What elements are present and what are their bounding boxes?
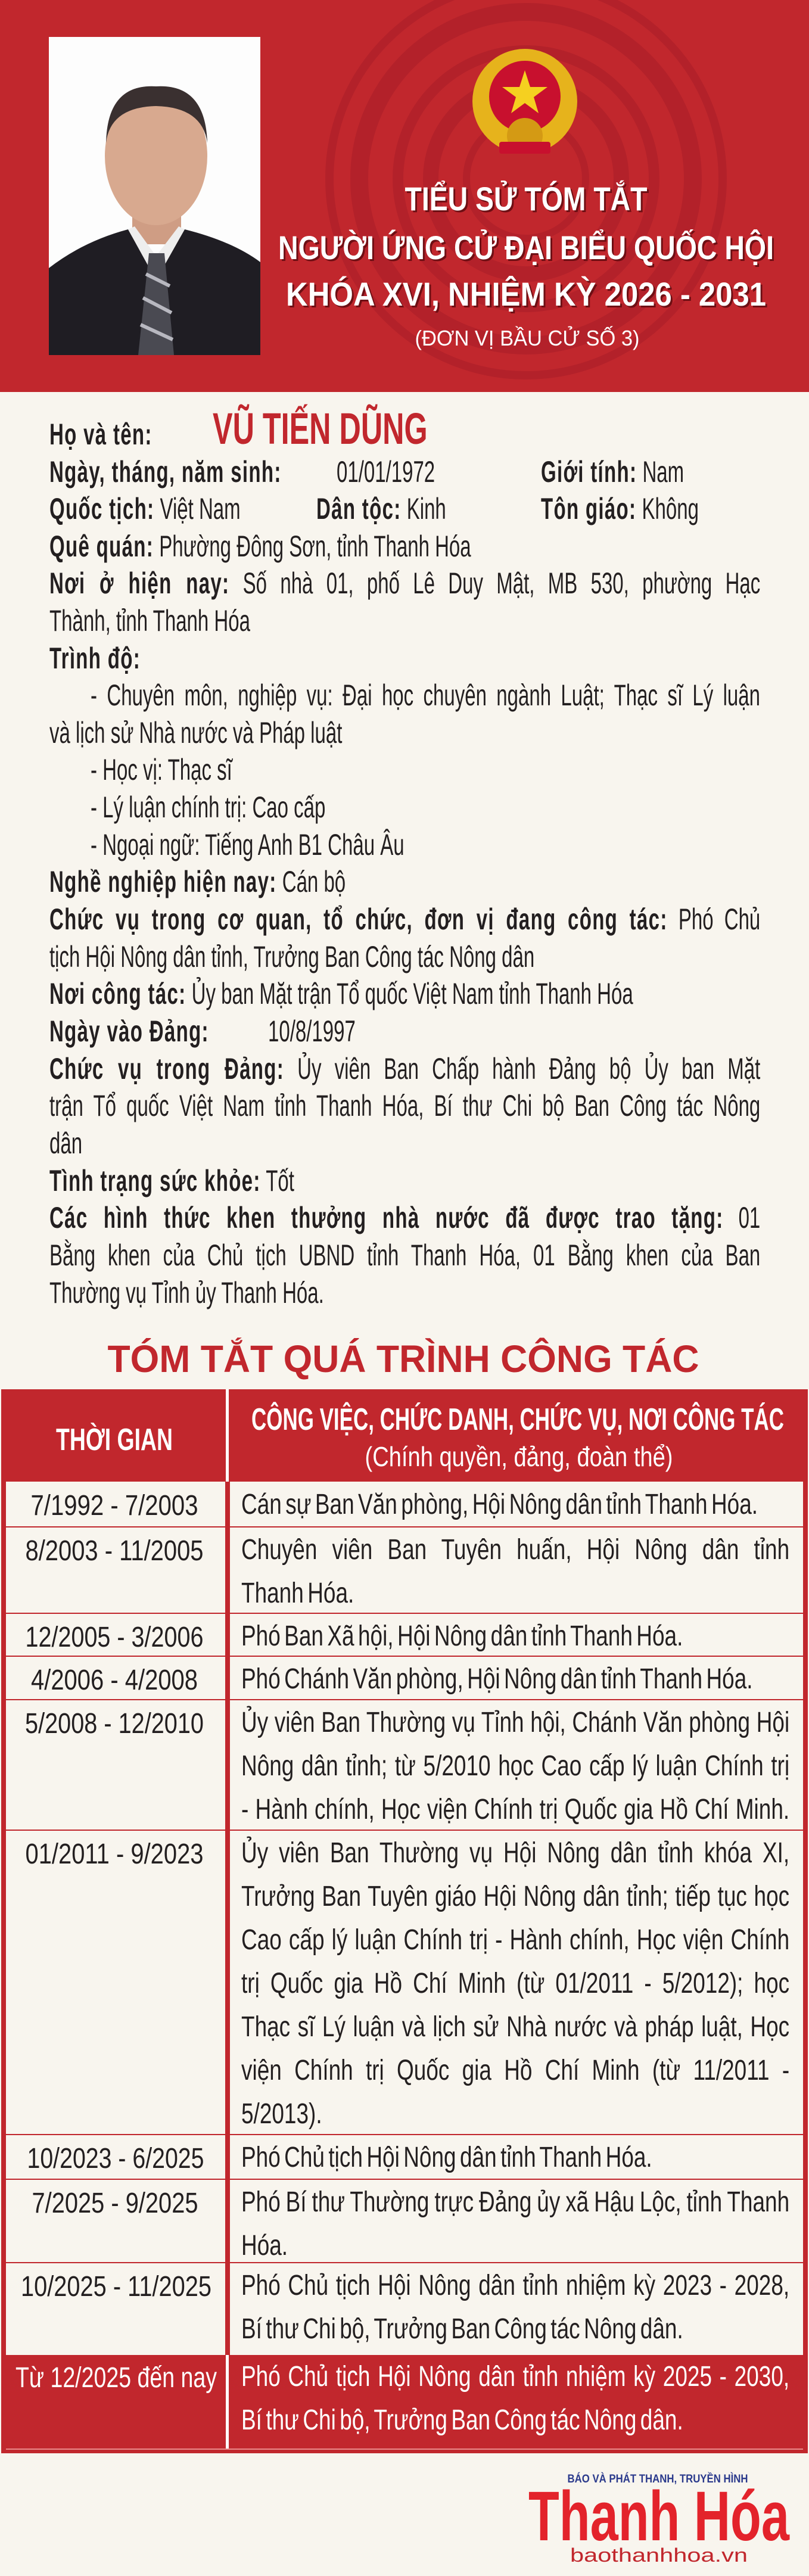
subtitle: (ĐƠN VỊ BẦU CỬ SỐ 3) bbox=[415, 325, 640, 350]
table rows: job descriptions: viện Chính trị Quốc gia Hồ Chí Minh (từ 11/2011 - bbox=[241, 2055, 789, 2086]
table grid bbox=[1, 1482, 808, 2355]
date column: 12/2005 - 3/2006 bbox=[25, 1622, 204, 1653]
panel: personal info: Tình trạng sức khỏe: Tốt bbox=[49, 1164, 294, 1197]
panel: personal info: Nơi ở hiện nay: Số nhà 01, phố Lê Duy Mật, MB 530, phường Hạc bbox=[49, 567, 760, 600]
panel: personal info: Chức vụ trong Đảng: Ủy viên Ban Chấp hành Đảng bộ Ủy ban Mặt bbox=[49, 1052, 760, 1085]
header banner bbox=[0, 0, 809, 392]
panel: personal info: 10/8/1997 bbox=[268, 1015, 356, 1048]
title: KHÓA XVI, NHIỆM KỲ 2026 - 2031 bbox=[288, 277, 768, 315]
date column bbox=[15, 1490, 217, 2394]
name: Họ và tên: bbox=[49, 418, 153, 451]
date column: 5/2008 - 12/2010 bbox=[25, 1708, 204, 1740]
table: work history bbox=[1, 1337, 808, 2566]
panel: personal info: Quốc tịch: Việt Nam bbox=[49, 492, 241, 525]
bronze drum background pattern bbox=[329, 0, 723, 375]
panel: personal info: và lịch sử Nhà nước và Pháp luật bbox=[49, 716, 342, 749]
panel: personal info: Tôn giáo: Không bbox=[541, 492, 699, 525]
panel: personal info: trận Tổ quốc Việt Nam tỉnh Thanh Hóa, Bí thư Chi bộ Ban Công tác Nông bbox=[49, 1089, 760, 1122]
table rows: job descriptions: Trưởng Ban Tuyên giáo Hội Nông dân tỉnh; tiếp tục học bbox=[241, 1881, 789, 1912]
photo: candidate portrait bbox=[49, 37, 260, 355]
table header: THỜI GIAN bbox=[56, 1423, 173, 1457]
table rows: job descriptions: Phó Chánh Văn phòng, Hội Nông dân tỉnh Thanh Hóa. bbox=[241, 1663, 753, 1695]
date column: 7/1992 - 7/2003 bbox=[31, 1490, 198, 1522]
panel: personal info: Ngày, tháng, năm sinh: bbox=[49, 455, 282, 489]
panel: personal info bbox=[49, 404, 760, 1309]
date column: 10/2025 - 11/2025 bbox=[21, 2271, 211, 2303]
date column: Từ 12/2025 đến nay bbox=[15, 2362, 217, 2394]
table rows: job descriptions: Phó Chủ tịch Hội Nông dân tỉnh Thanh Hóa. bbox=[241, 2142, 652, 2173]
panel: personal info: Chức vụ trong cơ quan, tổ chức, đơn vị đang công tác: Phó Chủ bbox=[49, 903, 760, 936]
panel: personal info: - Lý luận chính trị: Cao cấp bbox=[91, 791, 325, 824]
panel: personal info: VŨ TIẾN DŨNG bbox=[213, 404, 428, 453]
date column: 01/2011 - 9/2023 bbox=[25, 1838, 204, 1870]
table rows: job descriptions: Thạc sĩ Lý luận và lịch sử Nhà nước và pháp luật, Học bbox=[241, 2011, 789, 2043]
panel: personal info: - Học vị: Thạc sĩ bbox=[91, 753, 232, 786]
table rows: job descriptions: - Hành chính, Học viện Chính trị Quốc gia Hồ Chí Minh. bbox=[241, 1794, 789, 1825]
panel: personal info: dân bbox=[49, 1127, 82, 1160]
table rows: job descriptions: Bí thư Chi bộ, Trưởng Ban Công tác Nông dân. bbox=[241, 2404, 683, 2436]
panel: personal info: Dân tộc: Kinh bbox=[316, 492, 446, 525]
panel: personal info: Bằng khen của Chủ tịch UBND tỉnh Thanh Hóa, 01 Bằng khen của Ban bbox=[49, 1239, 760, 1272]
table rows: job descriptions: Ủy viên Ban Thường vụ Hội Nông dân tỉnh khóa XI, bbox=[241, 1837, 789, 1869]
footer logo: baothanhhoa.vn bbox=[570, 2544, 748, 2566]
panel: personal info: Các hình thức khen thưởng nhà nước đã được trao tặng: 01 bbox=[49, 1201, 760, 1234]
section heading: TÓM TẮT QUÁ TRÌNH CÔNG TÁC bbox=[107, 1337, 699, 1380]
panel: personal info: Nghề nghiệp hiện nay: Cán bộ bbox=[49, 865, 346, 898]
date column: 4/2006 - 4/2008 bbox=[31, 1665, 198, 1696]
panel: personal info: - Ngoại ngữ: Tiếng Anh B1 Châu Âu bbox=[91, 828, 404, 861]
title: TIỂU SỬ TÓM TẮT bbox=[406, 182, 649, 219]
panel: personal info: Giới tính: Nam bbox=[541, 455, 684, 489]
table rows: job descriptions: Thanh Hóa. bbox=[241, 1578, 354, 1609]
table rows: job descriptions: Cán sự Ban Văn phòng, Hội Nông dân tỉnh Thanh Hóa. bbox=[241, 1489, 758, 1520]
panel: personal info: Quê quán: Phường Đông Sơn, tỉnh Thanh Hóa bbox=[49, 530, 471, 563]
table rows: job descriptions: Phó Bí thư Thường trực Đảng ủy xã Hậu Lộc, tỉnh Thanh bbox=[241, 2186, 789, 2218]
panel: personal info: - Chuyên môn, nghiệp vụ: Đại học chuyên ngành Luật; Thạc sĩ Lý luận bbox=[91, 679, 760, 712]
table rows: job descriptions: Cao cấp lý luận Chính trị - Hành chính, Học viện Chính bbox=[241, 1924, 789, 1956]
table rows: job descriptions: 5/2013). bbox=[241, 2098, 322, 2130]
panel: personal info: tịch Hội Nông dân tỉnh, Trưởng Ban Công tác Nông dân bbox=[49, 940, 534, 973]
table rows: job descriptions: Nông dân tỉnh; từ 5/2010 học Cao cấp lý luận Chính trị bbox=[241, 1750, 789, 1782]
table rows: job descriptions: Phó Chủ tịch Hội Nông dân tỉnh nhiệm kỳ 2023 - 2028, bbox=[241, 2270, 789, 2301]
panel: personal info: Thường vụ Tỉnh ủy Thanh Hóa. bbox=[49, 1276, 324, 1309]
date column: 8/2003 - 11/2005 bbox=[25, 1535, 204, 1567]
table rows: job descriptions: Ủy viên Ban Thường vụ Tỉnh hội, Chánh Văn phòng Hội bbox=[241, 1707, 789, 1738]
panel: personal info: Ngày vào Đảng: bbox=[49, 1015, 209, 1048]
footer logo: BÁO VÀ PHÁT THANH, TRUYỀN HÌNH bbox=[567, 2472, 748, 2485]
table rows: job descriptions: Hóa. bbox=[241, 2230, 288, 2261]
title: KHÓA XVI, NHIỆM KỲ 2026 - 2031 bbox=[286, 275, 766, 313]
table header: (Chính quyền, đảng, đoàn thể) bbox=[365, 1441, 673, 1472]
highlighted current row background bbox=[1, 2355, 808, 2453]
panel: personal info: 01/01/1972 bbox=[337, 455, 435, 489]
date column: 7/2025 - 9/2025 bbox=[32, 2188, 198, 2219]
title: TIỂU SỬ TÓM TẮT bbox=[405, 180, 647, 217]
icon: national emblem bbox=[472, 49, 577, 154]
table rows: job descriptions: Phó Ban Xã hội, Hội Nông dân tỉnh Thanh Hóa. bbox=[241, 1620, 683, 1652]
table rows: job descriptions: Chuyên viên Ban Tuyên huấn, Hội Nông dân tỉnh bbox=[241, 1534, 789, 1566]
panel: personal info: Trình độ: bbox=[49, 642, 141, 675]
date column: 10/2023 - 6/2025 bbox=[27, 2143, 204, 2174]
panel: personal info: Thành, tỉnh Thanh Hóa bbox=[49, 604, 250, 637]
table rows: job descriptions: trị Quốc gia Hồ Chí Minh (từ 01/2011 - 5/2012); học bbox=[241, 1968, 789, 1999]
table header bbox=[1, 1389, 808, 1482]
table rows: job descriptions: Bí thư Chi bộ, Trưởng Ban Công tác Nông dân. bbox=[241, 2313, 683, 2345]
panel: personal info: Nơi công tác: Ủy ban Mặt trận Tổ quốc Việt Nam tỉnh Thanh Hóa bbox=[49, 977, 633, 1010]
table rows: job descriptions: Phó Chủ tịch Hội Nông dân tỉnh nhiệm kỳ 2025 - 2030, bbox=[241, 2361, 789, 2393]
title bbox=[278, 180, 776, 315]
